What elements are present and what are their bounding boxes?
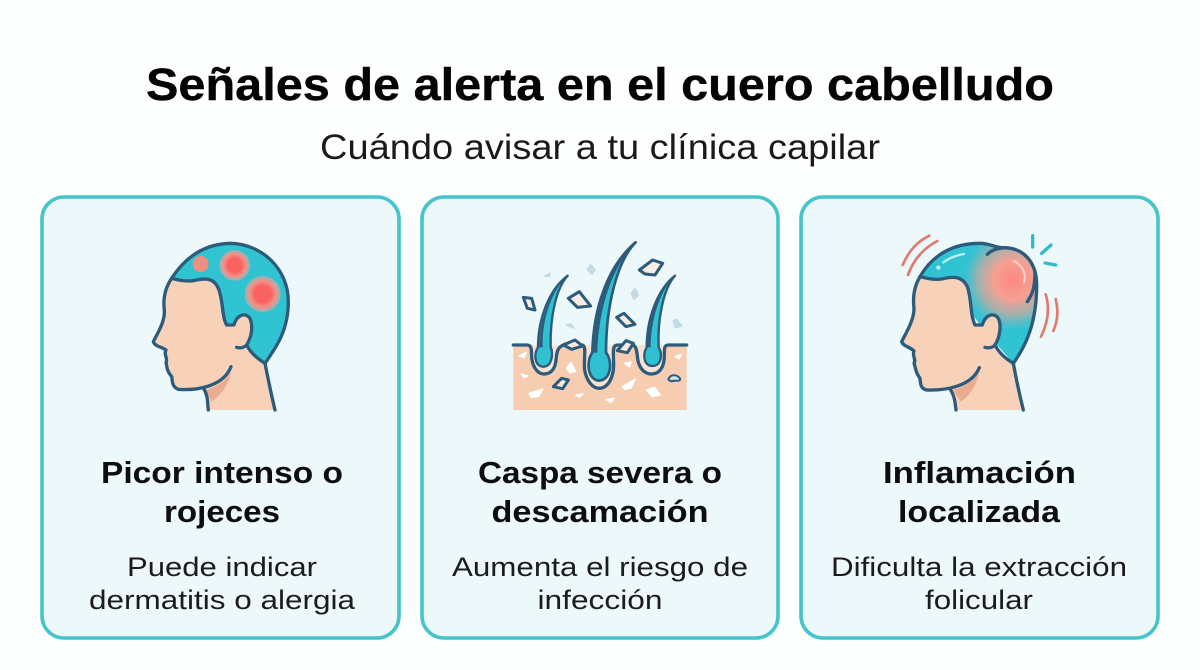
panel: caspa severa	[422, 197, 778, 638]
panel: picor intenso	[42, 197, 399, 638]
panel: caspa severa: infección	[538, 585, 662, 615]
icon: head with inflamed area	[902, 236, 1057, 410]
skin flakes	[519, 353, 681, 402]
flakes	[523, 297, 535, 310]
panel: picor intenso: rojeces	[164, 494, 280, 529]
icon: head with red spots	[153, 243, 288, 410]
alert marks	[903, 236, 1057, 337]
card background	[801, 197, 1158, 638]
card background	[422, 197, 778, 638]
panel: inflamación localizada: folicular	[925, 585, 1033, 615]
description: Puede indicar	[127, 552, 317, 582]
title: Señales de alerta en el cuero cabelludo	[146, 59, 1054, 110]
panel: picor intenso: dermatitis o alergia	[89, 585, 356, 615]
panel: caspa severa: descamación	[492, 494, 708, 529]
panel: inflamación localizada: localizada	[898, 494, 1061, 529]
card background	[42, 197, 399, 638]
description: Dificulta la extracción	[831, 552, 1127, 582]
heading: Inflamación	[883, 455, 1076, 490]
panel: inflamación localizada	[801, 197, 1158, 638]
hairs	[535, 276, 568, 367]
heading: Picor intenso o	[101, 455, 343, 490]
description: Aumenta el riesgo de	[452, 552, 748, 582]
icon: follicles with flakes	[513, 242, 687, 410]
subtitle: Cuándo avisar a tu clínica capilar	[320, 128, 880, 167]
heading: Caspa severa o	[478, 455, 722, 490]
